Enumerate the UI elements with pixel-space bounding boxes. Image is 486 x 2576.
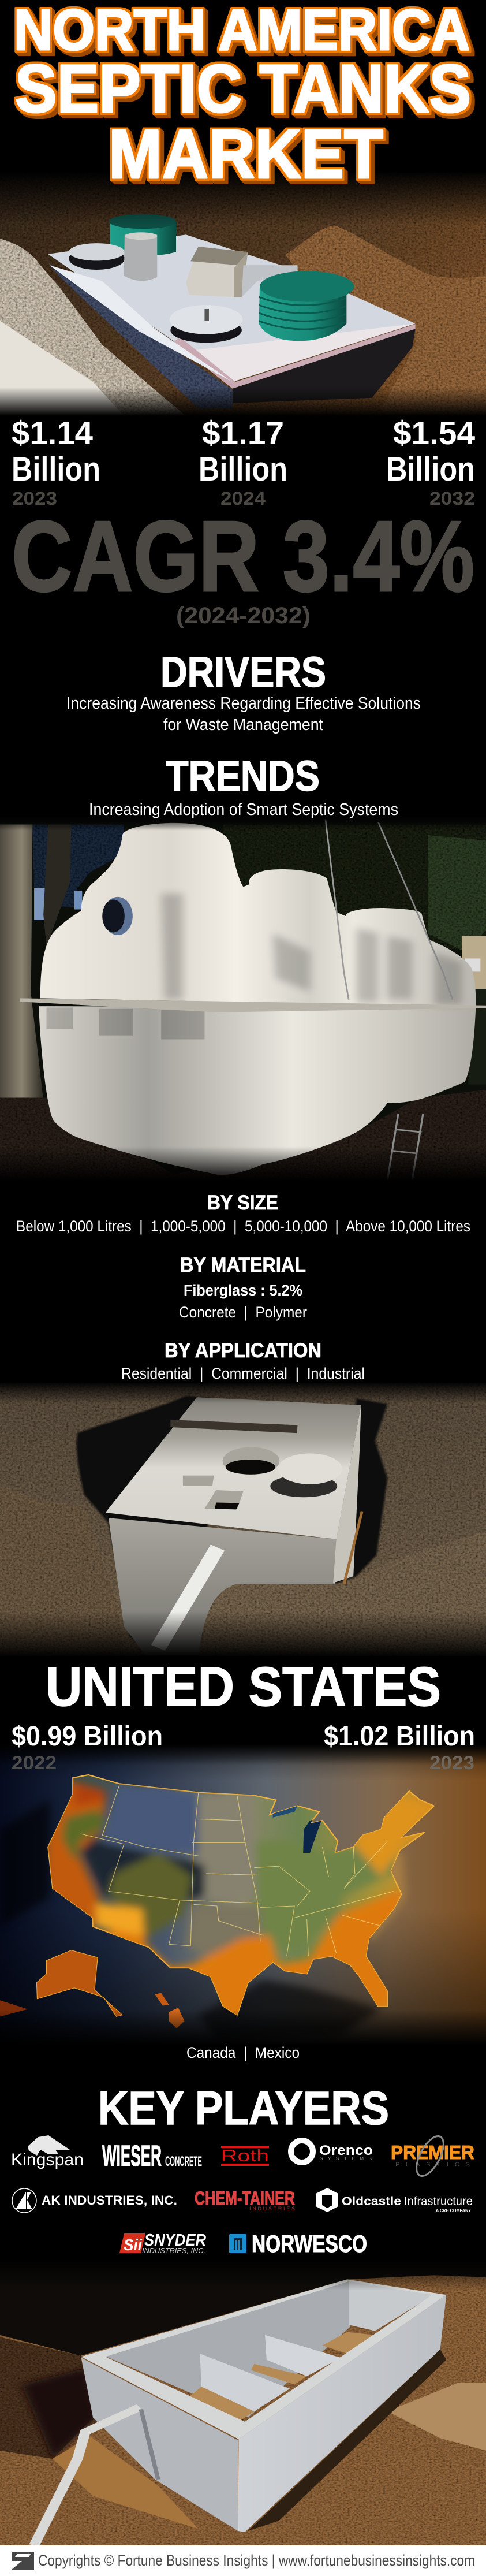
tank lid slab [48, 234, 416, 382]
drivers text [66, 694, 421, 734]
fade photo bottom [0, 1146, 486, 1181]
fade map bottom [0, 2010, 486, 2046]
flange [20, 998, 486, 1012]
green central band [245, 1841, 400, 1950]
tank top [106, 1397, 361, 1539]
title [14, 0, 471, 193]
trench left [77, 1396, 217, 1655]
small block [183, 1476, 214, 1486]
ground [0, 1090, 486, 1185]
fade bottom [0, 387, 486, 416]
drivers text: for Waste Management [163, 716, 323, 734]
front green riser [259, 286, 346, 341]
map shadow [0, 1800, 382, 2042]
by material segment [179, 1254, 307, 1321]
blue north band [102, 1785, 199, 1853]
stat: 2024 market size: 2024 [220, 488, 266, 509]
stat: 2032 market size [386, 415, 475, 509]
shadow of lid [270, 1475, 337, 1497]
warm glow [347, 1850, 406, 1941]
fade top [0, 1382, 486, 1404]
by application segment: Residential | Commercial | Industrial [121, 1365, 365, 1382]
logo: Snyder Industries: SNYDER [144, 2231, 206, 2250]
Great Lakes [303, 1819, 321, 1853]
logo: Premier Plastics [391, 2132, 474, 2180]
round port [103, 897, 133, 935]
cardboard box [186, 247, 248, 297]
fade photo top [0, 816, 486, 831]
logo: Premier Plastics: PLASTICS [395, 2161, 470, 2168]
by material segment: Concrete | Polymer [179, 1304, 307, 1321]
Hawaii [169, 2008, 185, 2028]
Alaska [36, 1950, 122, 2016]
plywood sheet [387, 2383, 486, 2451]
trends heading: TRENDS [166, 752, 320, 800]
by size segment [16, 1192, 470, 1235]
photo: concrete septic tank in trench [0, 1382, 486, 1658]
Gulf orange [102, 1886, 402, 2015]
black strip below photo [0, 1181, 486, 1188]
fade top [0, 170, 486, 225]
rear green riser [110, 221, 176, 255]
stat: 2023 market size: Billion [12, 451, 100, 488]
trench shadow [22, 2368, 99, 2459]
Alaska islands [0, 2000, 28, 2016]
trench right [335, 1398, 387, 1584]
drain pipe [34, 2407, 140, 2545]
logo: Roth: Roth [221, 2147, 269, 2165]
logo: Oldcastle Infrastructure: A CRH COMPANY [436, 2208, 472, 2213]
grey cylinder [124, 234, 157, 281]
logo: Oldcastle Infrastructure: Infrastructure [404, 2195, 473, 2208]
text: CONCRETE [165, 2154, 202, 2169]
tank front [109, 1518, 337, 1655]
front lid [170, 318, 242, 343]
upper hull [40, 823, 476, 1006]
mound of soil [285, 225, 486, 416]
square hatch [204, 1490, 244, 1509]
photo: block septic tank under construction [0, 2255, 486, 2546]
US 2022 value: $0.99 Billion [12, 1721, 163, 1752]
stat: 2023 market size [12, 415, 100, 509]
logo: Roth [221, 2146, 269, 2166]
logo: Norwesco: NORWESCO [252, 2230, 367, 2257]
logo: Kingspan: Kingspan [11, 2150, 84, 2169]
photo: septic tank in excavated soil [0, 170, 486, 416]
stat: 2023 market size: 2023 [12, 488, 57, 509]
by application segment: BY APPLICATION [165, 1339, 321, 1362]
dark background corner [0, 2261, 486, 2356]
logo: Orenco Systems [291, 2141, 373, 2162]
other countries: Canada | Mexico [186, 2044, 300, 2061]
US 2023 value [324, 1721, 475, 1773]
muddy water at base [53, 2436, 199, 2529]
fade bottom [0, 1611, 486, 1658]
dark south-west basin [74, 1836, 204, 1909]
by material segment: BY MATERIAL [180, 1254, 306, 1276]
by size segment: BY SIZE [207, 1192, 278, 1214]
by application segment [121, 1339, 365, 1382]
stat: 2023 market size: $1.14 [12, 415, 93, 452]
fade top [0, 2255, 486, 2290]
US 2023 value: 2023 [429, 1752, 474, 1773]
logo: Snyder Industries: Sii [124, 2236, 143, 2254]
logo: Chem-Tainer: CHEM-TAINER [195, 2188, 295, 2209]
logo: Orenco Systems: Orenco [319, 2143, 373, 2158]
marker stake [344, 1512, 362, 1584]
stat: 2032 market size: Billion [386, 451, 475, 488]
manhole [223, 1447, 279, 1475]
footer band [0, 2545, 486, 2576]
logo: Orenco Systems: SYSTEMS [320, 2156, 372, 2161]
footer logo [12, 2552, 34, 2570]
ladder [387, 1114, 423, 1180]
sky patches [32, 825, 124, 907]
stat: 2024 market size: $1.17 [202, 415, 284, 452]
lifting cables [326, 819, 349, 1000]
stat: 2024 market size [199, 415, 287, 509]
drivers text: Increasing Awareness Regarding Effective Solutions [66, 694, 421, 713]
soft colour areas [47, 1782, 434, 2030]
tree trunks [0, 825, 43, 1100]
logo: Premier Plastics: PREMIER [391, 2142, 474, 2163]
tank right side [333, 1405, 361, 1583]
logo: AK Industries: AK INDUSTRIES, INC. [42, 2193, 177, 2208]
state borders [81, 1785, 394, 1956]
US 2023 value: $1.02 Billion [324, 1721, 475, 1752]
photo: fiberglass septic tank [0, 816, 486, 1188]
trends text: Increasing Adoption of Smart Septic Systems [89, 801, 398, 819]
by material segment: Fiberglass : 5.2% [184, 1282, 302, 1299]
baffle walls [200, 2354, 290, 2411]
tank side [48, 263, 233, 408]
CAGR period: (2024-2032) [176, 603, 311, 628]
logo: Chem-Tainer: INDUSTRIES [249, 2206, 295, 2212]
contiguous states [48, 1775, 434, 2015]
tank shadow strip [248, 2350, 446, 2531]
logo: Oldcastle Infrastructure [316, 2188, 473, 2213]
soil in front [199, 1531, 486, 1655]
left front face [81, 2358, 238, 2531]
stat: 2024 market size: Billion [199, 451, 287, 488]
title: MARKET [109, 116, 383, 193]
drivers heading: DRIVERS [160, 648, 326, 696]
logo: Norwesco [229, 2230, 367, 2257]
right front face [238, 2295, 446, 2532]
logo: Snyder Industries [119, 2231, 206, 2255]
US 2022 value: 2022 [12, 1752, 57, 1773]
logo: Oldcastle Infrastructure: Oldcastle [342, 2195, 401, 2208]
US 2022 value [12, 1721, 163, 1773]
left bank [0, 239, 186, 416]
stat: 2032 market size: $1.54 [393, 415, 475, 452]
white pipe [158, 1548, 218, 1648]
manhole lid [278, 1453, 342, 1484]
rear lid [69, 247, 125, 270]
logo: Kingspan [11, 2135, 84, 2169]
lower hull [39, 1006, 476, 1175]
logo: Snyder Industries: INDUSTRIES, INC. [142, 2246, 205, 2255]
fade map top [0, 1744, 486, 1765]
compartments water [189, 2387, 254, 2422]
logo: Wieser Concrete: WIESER [102, 2139, 162, 2172]
level bar [170, 1420, 298, 1433]
key players heading: KEY PLAYERS [98, 2082, 389, 2135]
rim [81, 2279, 446, 2439]
map: United States relief [0, 1744, 486, 2046]
logo: AK Industries [12, 2188, 177, 2213]
United States heading: UNITED STATES [46, 1656, 441, 1718]
interior walls [104, 2281, 350, 2418]
stat: 2032 market size: 2032 [429, 488, 475, 509]
